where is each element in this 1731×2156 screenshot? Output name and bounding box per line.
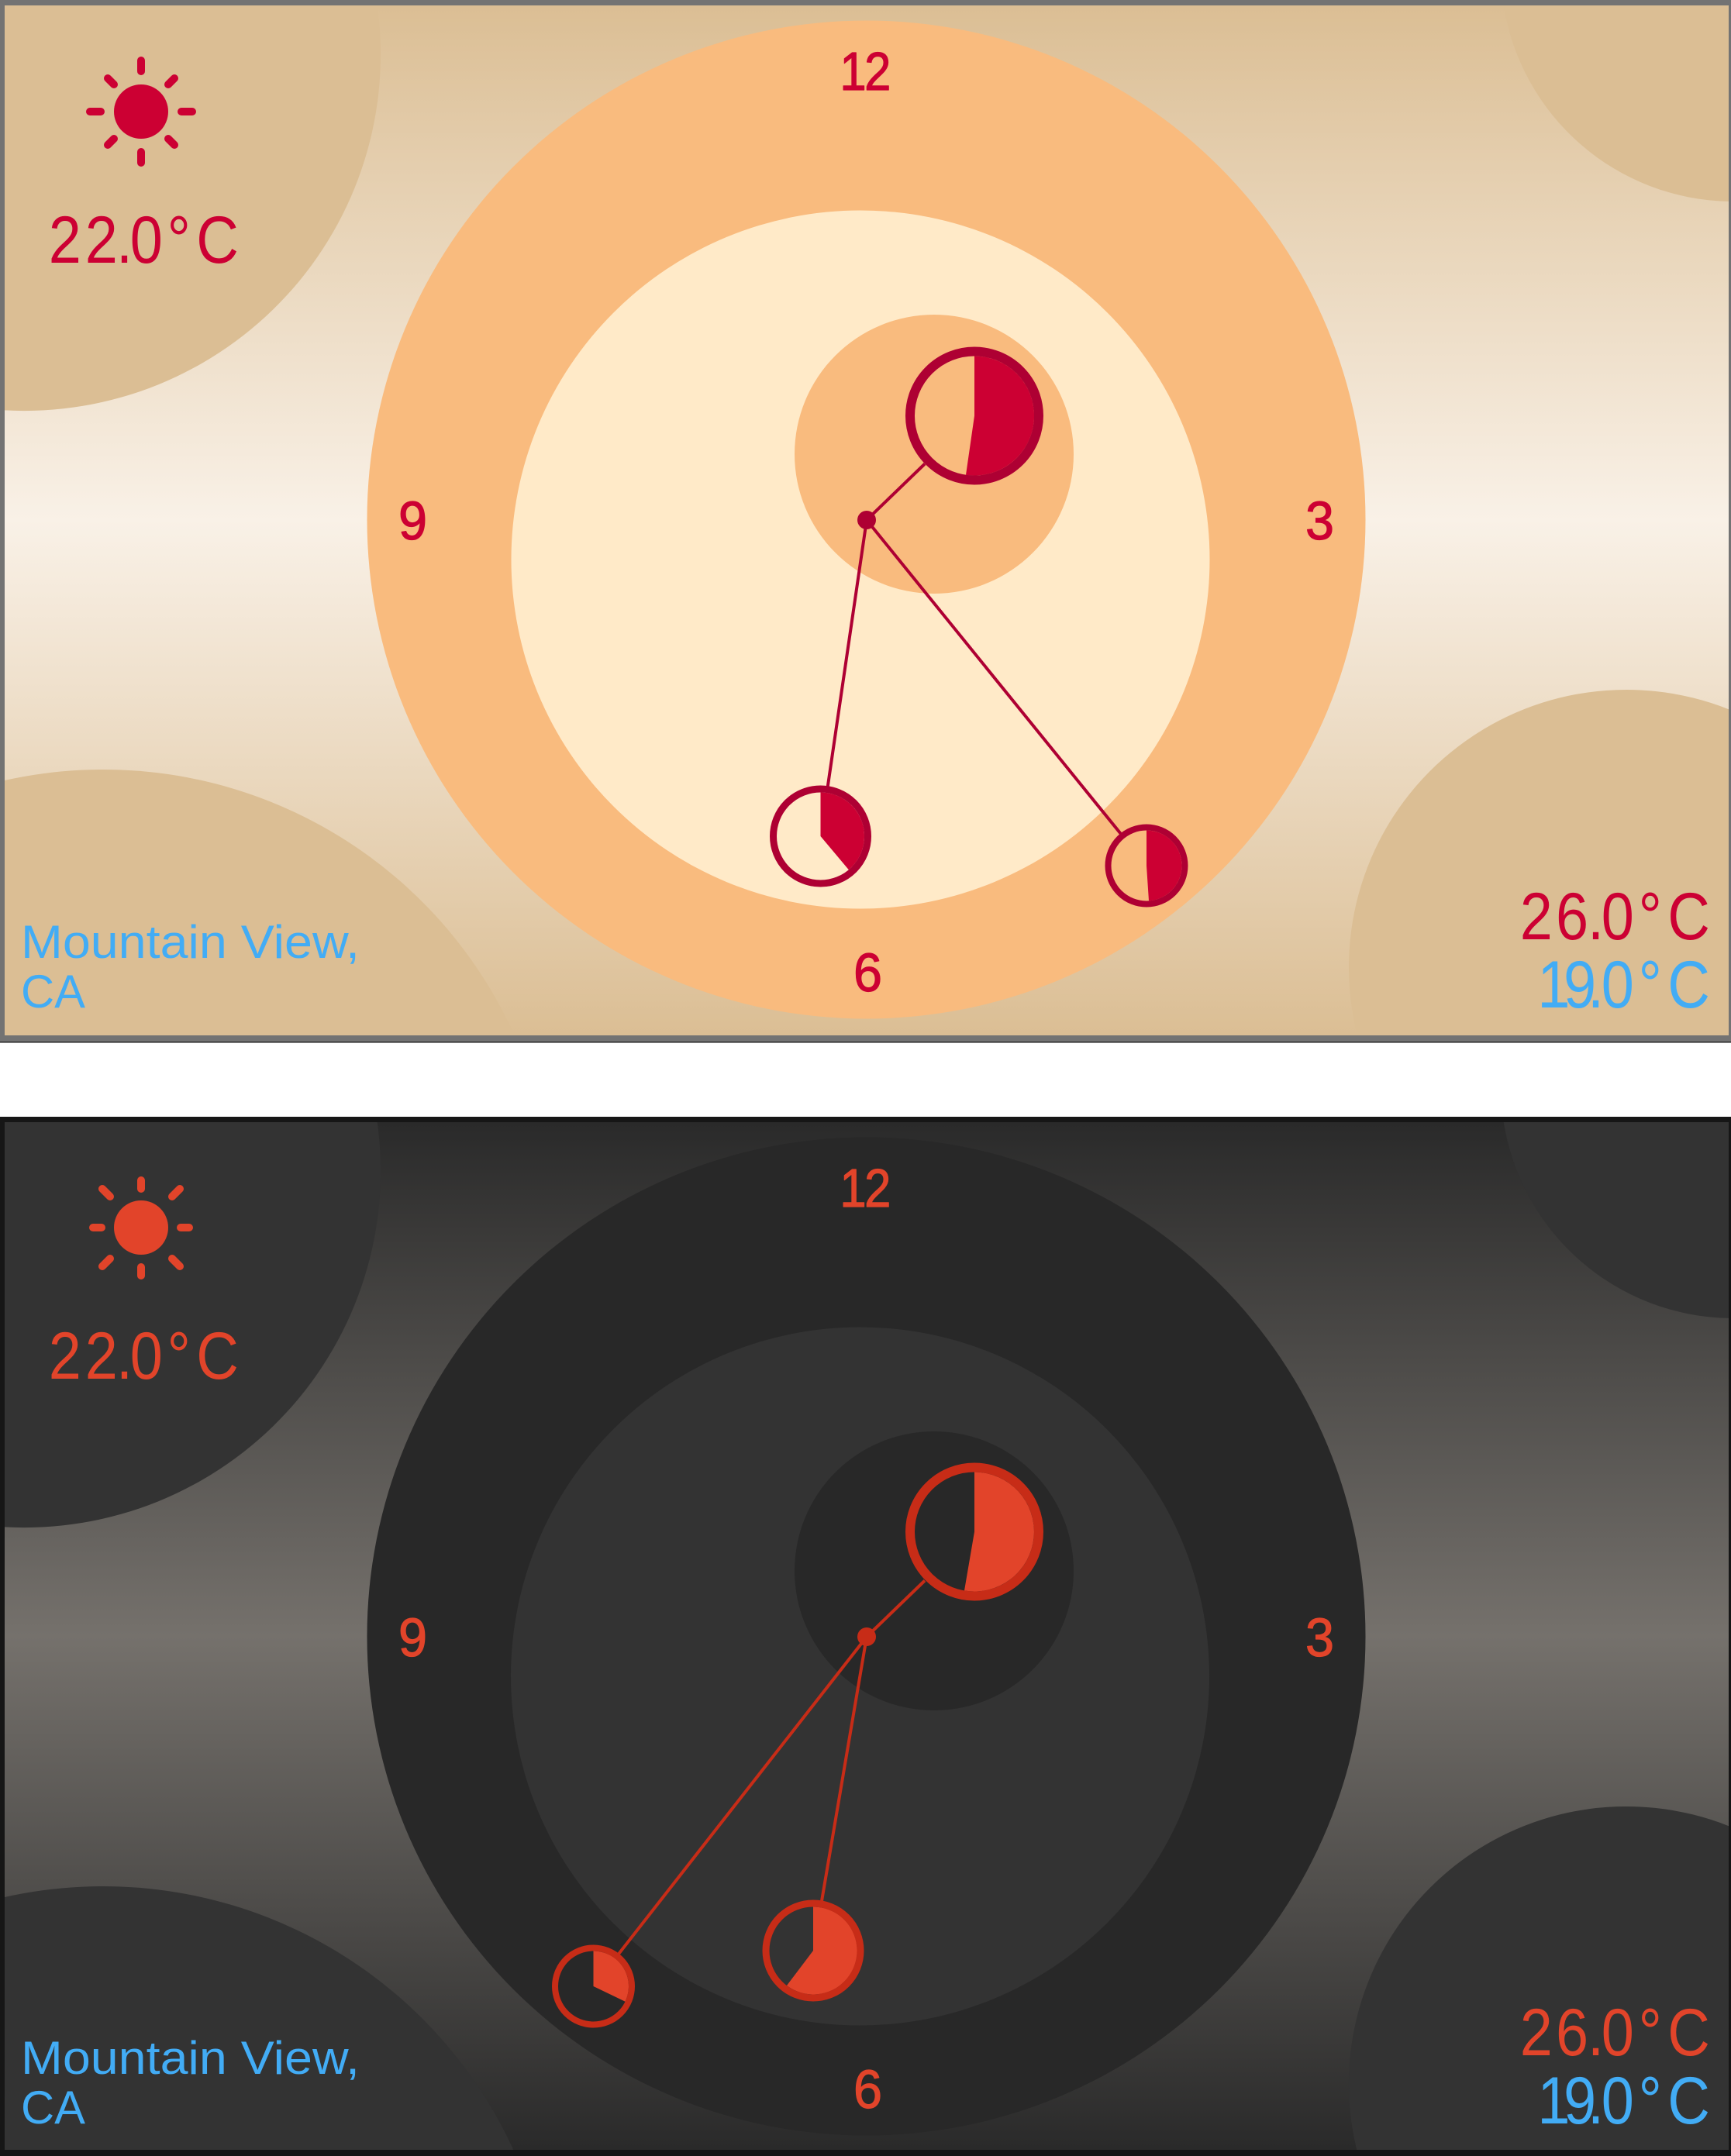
location <box>21 916 360 1018</box>
current temperature: 22.0°C <box>49 1320 239 1393</box>
location: Mountain View, <box>21 2032 360 2084</box>
clock numerals: 12 <box>840 1157 891 1218</box>
icon: sun <box>90 60 192 163</box>
panel: light theme <box>0 0 1731 1043</box>
low temperature: 19.0°C <box>1537 2065 1710 2138</box>
clock numerals: 6 <box>853 942 882 1003</box>
hand pivot <box>857 1627 876 1646</box>
location: Mountain View, <box>21 916 360 968</box>
clock hands <box>828 463 1121 834</box>
clock face <box>367 1138 1366 2136</box>
hand pivot <box>857 511 876 529</box>
high temperature: 26.0°C <box>1520 880 1710 954</box>
moon: large <box>910 1468 1039 1596</box>
background blobs <box>5 1122 1729 2150</box>
clock face <box>367 20 1366 1018</box>
moon: lower left <box>774 789 868 883</box>
clock numerals: 12 <box>840 40 891 102</box>
clock numerals: 9 <box>398 1607 427 1668</box>
low temperature: 19.0°C <box>1537 949 1710 1022</box>
location: CA <box>21 2082 85 2134</box>
icon: sun <box>93 1180 189 1276</box>
location: CA <box>21 966 85 1018</box>
current temperature: 22.0°C <box>49 204 239 277</box>
clock numerals: 6 <box>853 2059 882 2120</box>
background blobs <box>5 5 1729 1035</box>
clock numerals: 3 <box>1305 1607 1334 1668</box>
clock numerals: 9 <box>398 491 427 551</box>
clock numerals: 3 <box>1305 491 1334 551</box>
clock hands <box>619 1581 925 1954</box>
moon: lower middle <box>766 1903 860 1998</box>
high temperature: 26.0°C <box>1520 1996 1710 2070</box>
moon: lower left <box>555 1948 632 2024</box>
moon: large <box>910 352 1039 480</box>
clock numerals <box>398 1157 1334 2120</box>
location <box>21 2032 360 2134</box>
clock numerals <box>398 40 1334 1003</box>
moon: lower right <box>1109 828 1184 904</box>
panel: dark theme <box>0 1117 1731 2156</box>
